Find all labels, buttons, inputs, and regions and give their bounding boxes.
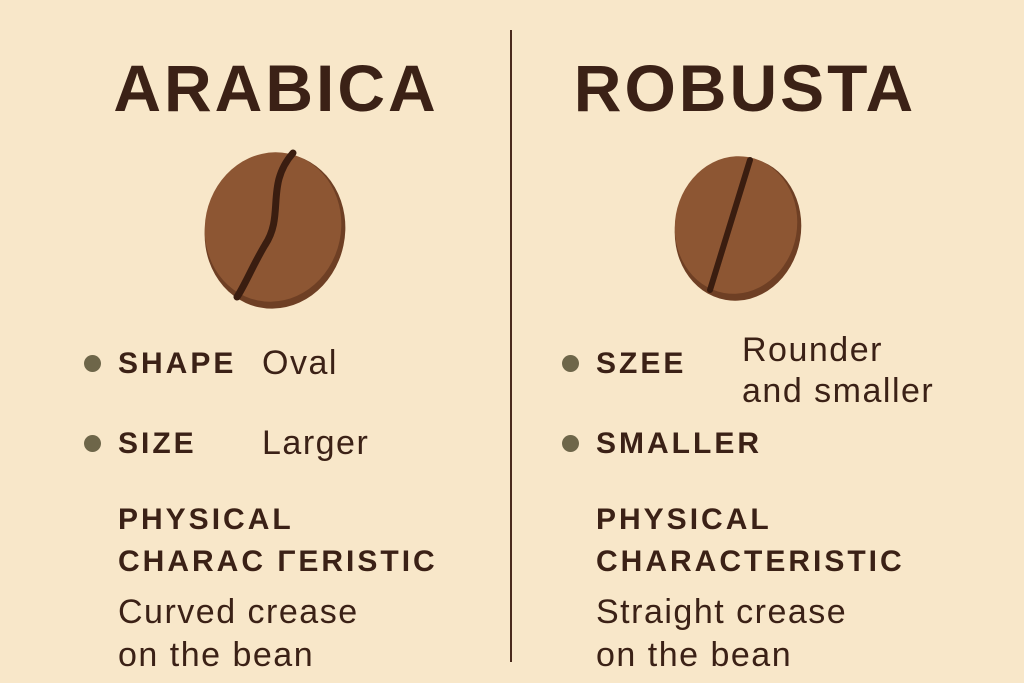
robusta row: size: SZEE — [596, 347, 686, 380]
arabica physical characteristic: PHYSICAL — [118, 503, 294, 536]
arabica row: size: SIZE — [118, 427, 197, 460]
icon: robusta bean — [674, 156, 802, 301]
divider — [510, 30, 512, 662]
robusta physical characteristic: on the bean — [596, 636, 792, 674]
arabica physical characteristic — [118, 503, 438, 674]
arabica row: size: Larger — [262, 424, 369, 462]
arabica row: size — [84, 424, 369, 462]
robusta physical characteristic: Straight crease — [596, 593, 847, 631]
arabica row: shape: SHAPE — [118, 347, 236, 380]
arabica physical characteristic: CHARAC ΓERISTIC — [118, 545, 438, 578]
robusta row: smaller: SMALLER — [596, 427, 762, 460]
robusta row: size — [562, 331, 934, 410]
robusta row: size: Rounder — [742, 331, 883, 369]
arabica row: shape: Oval — [262, 344, 338, 382]
icon: arabica bean — [204, 150, 346, 309]
robusta physical characteristic: CHARACTERISTIC — [596, 545, 905, 578]
robusta physical characteristic — [596, 503, 905, 674]
title: robusta: ROBUSTA — [574, 51, 916, 125]
arabica physical characteristic: on the bean — [118, 636, 314, 674]
robusta physical characteristic: PHYSICAL — [596, 503, 772, 536]
arabica row: shape — [84, 344, 338, 382]
arabica physical characteristic: Curved crease — [118, 593, 359, 631]
title: arabica: ARABICA — [113, 51, 439, 125]
robusta row: size: and smaller — [742, 372, 934, 410]
